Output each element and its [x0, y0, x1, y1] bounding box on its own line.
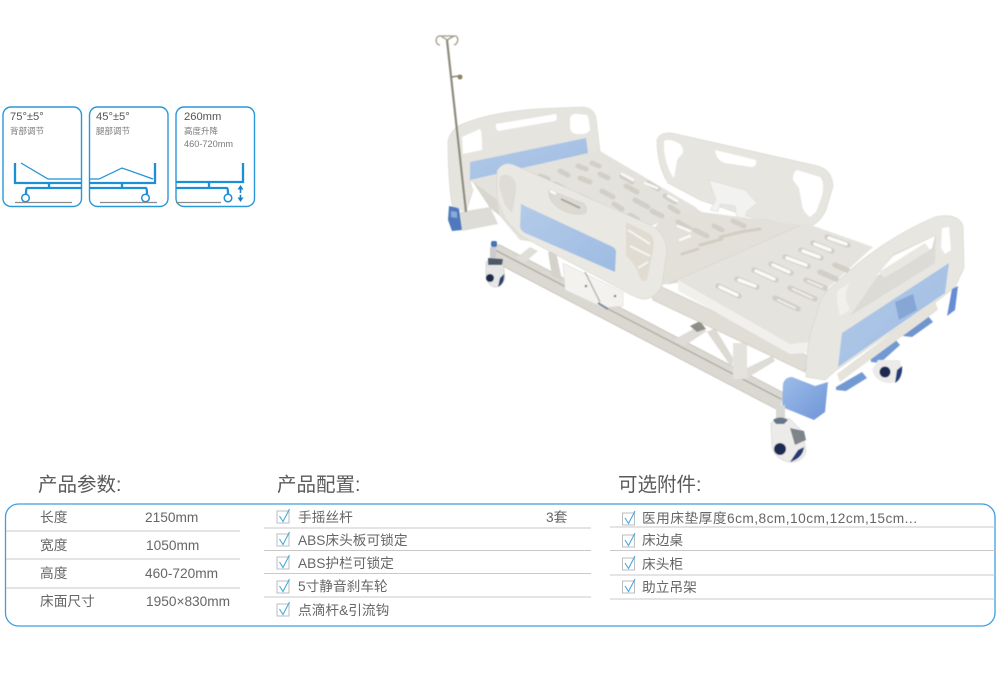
near side rail — [497, 164, 667, 299]
icon: height adjustment card — [176, 107, 254, 206]
diagram: bed with raised knee section — [89, 163, 157, 202]
item: ABS headboard: ABS床头板可锁定 — [298, 533, 408, 548]
text: height range value: 260mm — [184, 111, 221, 123]
frame struts — [516, 247, 775, 379]
row: width: 1050mm — [146, 538, 199, 553]
text: leg angle value: 45°±5° — [96, 111, 130, 123]
row: surface size — [40, 594, 230, 609]
list: product configuration — [264, 509, 591, 618]
item: bedside cabinet: 床头柜 — [642, 557, 683, 572]
iv pole — [436, 36, 466, 212]
text: back adjustment label: 背部调节 — [10, 126, 45, 136]
middle leg deck — [640, 209, 802, 285]
icon: leg angle adjustment card — [89, 107, 168, 206]
row: surface size: 床面尺寸 — [40, 594, 95, 609]
item: standing aid frame: 助立吊架 — [642, 580, 697, 595]
caster: rear left — [486, 241, 505, 287]
head deck — [472, 151, 697, 250]
item: standing aid frame — [622, 579, 697, 595]
footboard — [806, 216, 964, 382]
row: length: 2150mm — [145, 510, 198, 525]
icon: back angle adjustment card — [3, 107, 82, 206]
text: height adjustment label: 高度升降 — [184, 126, 219, 136]
row: length: 长度 — [40, 510, 68, 525]
diagram: bed with height arrows — [176, 163, 244, 202]
item: bedside table — [622, 533, 683, 548]
pedals and rear casters — [836, 316, 933, 391]
bracket and rear blue corner — [448, 206, 498, 231]
row: width — [40, 537, 199, 553]
list: optional accessories — [610, 511, 995, 599]
row: surface size: 1950×830mm — [146, 594, 230, 609]
foot deck — [678, 224, 873, 354]
table: product parameters — [6, 510, 240, 609]
photo: manual hospital bed — [436, 36, 964, 462]
heading: product configuration: 产品配置: — [277, 474, 360, 496]
lower side frame rail — [493, 245, 784, 410]
headboard — [448, 107, 600, 212]
far side rail — [657, 133, 833, 227]
row: height: 高度 — [40, 565, 68, 581]
item: iv pole and drainage hook: 点滴杆&引流钩 — [298, 602, 389, 618]
caster: front — [771, 405, 806, 462]
item: hand crank: 手摇丝杆 — [298, 510, 353, 525]
blue bumper corners — [782, 286, 958, 420]
row: width: 宽度 — [40, 537, 68, 553]
row: length — [40, 510, 198, 525]
text: leg adjustment label: 腿部调节 — [96, 126, 131, 136]
item: ABS side rail: ABS护栏可锁定 — [298, 556, 394, 571]
heading: product parameters: 产品参数: — [38, 474, 121, 496]
heading: optional accessories: 可选附件: — [618, 474, 701, 496]
row: height: 460-720mm — [145, 566, 218, 581]
diagram: bed with raised back — [15, 163, 82, 202]
item: bedside cabinet — [622, 556, 683, 572]
item: silent casters: 5寸静音刹车轮 — [298, 578, 388, 594]
row: height — [40, 565, 218, 581]
text: height range: 460-720mm — [184, 139, 233, 149]
item: hand crank — [277, 509, 568, 525]
crank mechanism — [563, 263, 623, 309]
item: mattress: 医用床垫厚度6cm,8cm,10cm,12cm,15cm... — [642, 511, 917, 526]
panel: specification frame — [6, 504, 995, 626]
item: bedside table: 床边桌 — [642, 533, 683, 548]
upper side frame rail — [650, 283, 808, 372]
text: back angle value: 75°±5° — [10, 111, 44, 123]
item: hand crank: 3套 — [546, 510, 568, 525]
